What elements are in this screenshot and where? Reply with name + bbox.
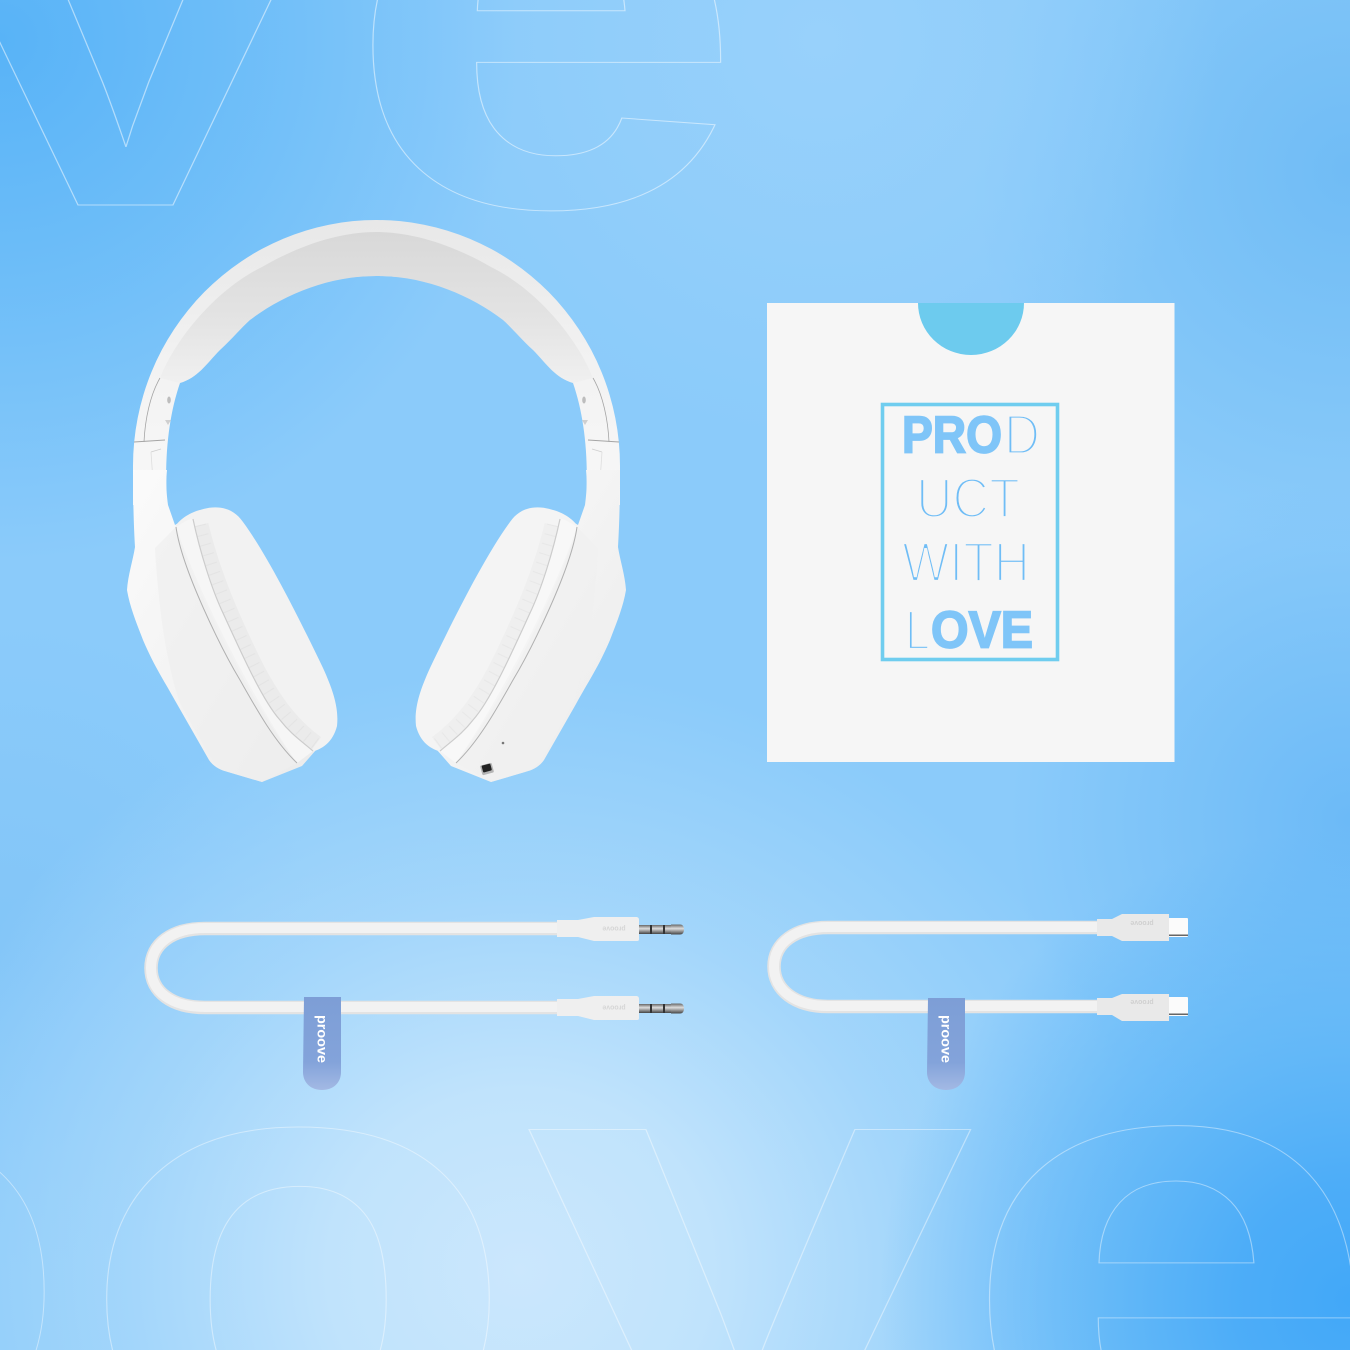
right seam: [456, 527, 577, 763]
watermark letters bottom: [0, 891, 1350, 1350]
logo thin letters: [902, 403, 1040, 662]
right pad shading: [437, 525, 553, 744]
headband pad: [160, 232, 593, 383]
left housing: [127, 470, 316, 782]
left pad shading: [200, 525, 316, 744]
top usb-c plug: proove: [1130, 919, 1154, 926]
cable strap: [927, 998, 965, 1090]
right pad ribs: [437, 525, 553, 744]
logo thin letters: WITH: [902, 530, 1030, 594]
status light: [502, 742, 504, 744]
top usb-c plug: [1097, 914, 1188, 941]
logo bold letters: OVE: [931, 602, 1033, 660]
headphones: [127, 220, 626, 782]
left pad ribs: [200, 525, 316, 744]
cable strap: proove: [314, 1015, 330, 1063]
card notch: [918, 303, 1024, 355]
bottom usb-c plug: [1097, 994, 1188, 1021]
left ear pad: [175, 507, 337, 763]
right hinge details: [582, 378, 619, 525]
cable body: [774, 928, 1100, 1006]
bottom usb-c plug: proove: [1130, 998, 1154, 1005]
left pad rim: [176, 519, 313, 763]
top jack: proove: [602, 924, 626, 932]
audio cable: [151, 917, 684, 1090]
right ear cup: [416, 470, 626, 782]
logo frame: [882, 404, 1058, 660]
card sheet: [767, 303, 1174, 762]
headband shell: [133, 220, 620, 505]
watermark letters top: [0, 0, 745, 333]
bottom jack: proove: [602, 1004, 626, 1010]
logo bold letters: PRO: [902, 406, 1002, 464]
left rib edge: [193, 519, 313, 751]
left hinge details: [134, 378, 171, 525]
right ear pad: [416, 507, 578, 763]
top jack: [557, 917, 684, 941]
left seam: [176, 527, 297, 763]
cable body: [151, 928, 560, 1008]
product card: [767, 303, 1174, 762]
cable strap: proove: [938, 1015, 954, 1063]
charging port: [480, 763, 494, 775]
logo bold letters: [902, 406, 1033, 660]
right housing: [437, 470, 626, 782]
left housing facet: [155, 527, 297, 782]
logo thin letters: L: [905, 598, 930, 662]
left ear cup: [127, 470, 337, 782]
right rib edge: [440, 519, 560, 751]
right housing facet: [456, 527, 598, 782]
logo thin letters: UCT: [916, 466, 1020, 530]
bottom jack: [557, 996, 684, 1020]
right pad rim: [440, 519, 577, 763]
usb-c cable: [774, 914, 1188, 1090]
cable strap: [303, 997, 341, 1090]
logo thin letters: D: [1004, 403, 1040, 467]
